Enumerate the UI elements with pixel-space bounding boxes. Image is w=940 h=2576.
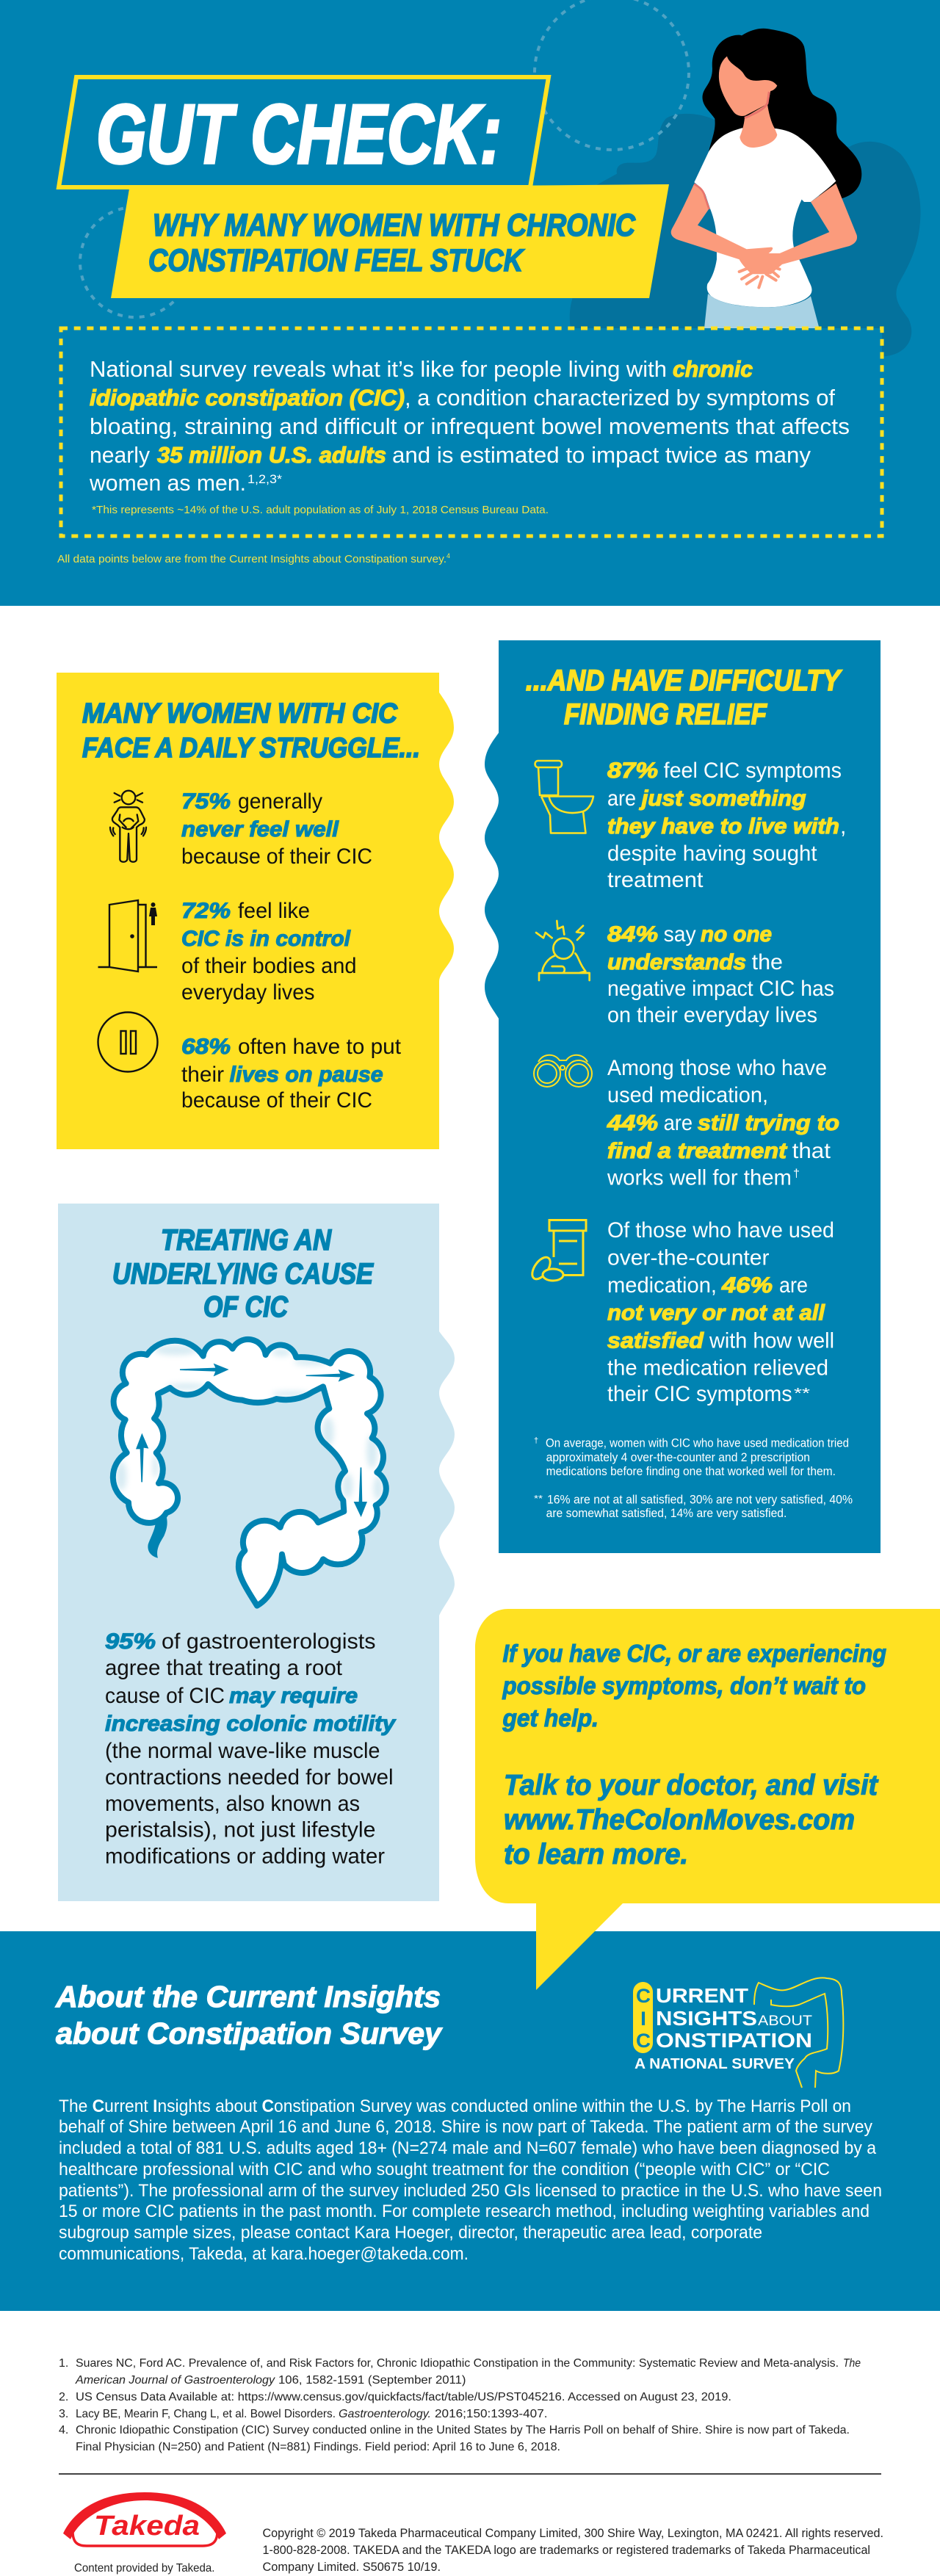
copyright: Copyright © 2019 Takeda Pharmaceutical Company Limited, 300 Shire Way, Lexington, MA 02421. All rights reserved. bbox=[263, 2527, 883, 2540]
stat: 72 percent: 72% bbox=[181, 899, 231, 923]
heading: underlying cause: OF CIC bbox=[203, 1291, 289, 1323]
survey description bbox=[59, 2096, 882, 2264]
heading: daily struggle: FACE A DAILY STRUGGLE... bbox=[82, 733, 420, 764]
stat: 46 percent: medication, bbox=[607, 1273, 717, 1298]
callout: talk to your doctor bbox=[475, 1609, 940, 1990]
stat: 84 percent: the bbox=[752, 950, 783, 974]
callout text: visit website: Talk to your doctor, and visit bbox=[504, 1770, 879, 1801]
stat: 95 percent: cause of CIC bbox=[105, 1684, 225, 1708]
heading: daily struggle bbox=[82, 698, 420, 764]
stat: 46 percent: their CIC symptoms bbox=[607, 1382, 792, 1406]
stat: 87 percent: , bbox=[840, 814, 846, 839]
stat: 95 percent: (the normal wave-like muscle bbox=[105, 1739, 380, 1763]
references: Gastroenterology. bbox=[339, 2408, 431, 2420]
credit line: Content provided by Takeda. bbox=[74, 2562, 214, 2575]
stat: 68 percent bbox=[181, 1035, 402, 1112]
stat: 44 percent: still trying to bbox=[698, 1111, 839, 1135]
stat: 95 percent: contractions needed for bowel bbox=[105, 1765, 394, 1790]
callout text: visit website: www.TheColonMoves.com bbox=[504, 1804, 855, 1836]
stat: 44 percent: used medication, bbox=[607, 1083, 768, 1107]
stat: 68 percent: lives on pause bbox=[230, 1063, 383, 1087]
stat: 44 percent: † bbox=[793, 1168, 800, 1180]
stat: 75 percent: never feel well bbox=[181, 817, 339, 842]
references: Final Physician (N=250) and Patient (N=881) Findings. Field period: April 16 to June 6, 2018. bbox=[76, 2441, 560, 2453]
stat: 95 percent bbox=[105, 1629, 396, 1869]
icon: door bbox=[98, 900, 157, 972]
stat: 87 percent: treatment bbox=[607, 868, 704, 892]
stat: 44 percent: 44% bbox=[607, 1111, 658, 1135]
footnotes: † bbox=[534, 1436, 538, 1445]
icon: toilet bbox=[535, 761, 593, 833]
stat: 75 percent: 75% bbox=[181, 789, 231, 814]
arrows: colon motility direction bbox=[136, 1364, 367, 1517]
stat: 75 percent: because of their CIC bbox=[181, 844, 372, 869]
stat: 95 percent: modifications or adding water bbox=[105, 1845, 385, 1869]
stat: 44 percent: that bbox=[792, 1139, 831, 1163]
intro text: women as men. bbox=[89, 470, 246, 496]
callout text: symptoms: possible symptoms, don’t wait to bbox=[502, 1672, 866, 1699]
heading: underlying cause: UNDERLYING CAUSE bbox=[112, 1258, 374, 1290]
icon: binoculars bbox=[534, 1055, 592, 1087]
dashed circle left bbox=[80, 207, 190, 317]
references: 2016;150:1393-407. bbox=[435, 2408, 548, 2420]
references: 3. bbox=[59, 2408, 68, 2420]
heading: about the survey bbox=[55, 1980, 443, 2050]
intro text: chronic bbox=[673, 356, 753, 382]
data source note: All data points below are from the Current Insights about Constipation survey. bbox=[57, 554, 446, 565]
stat: 95 percent: movements, also known as bbox=[105, 1792, 360, 1816]
logo: Takeda bbox=[63, 2492, 226, 2546]
stat: 72 percent: CIC is in control bbox=[181, 927, 351, 951]
stat: 95 percent: 95% bbox=[105, 1629, 156, 1654]
stat: 72 percent: everyday lives bbox=[181, 980, 314, 1005]
stat: 87 percent: feel CIC symptoms bbox=[664, 759, 842, 783]
stat: 75 percent: generally bbox=[238, 789, 322, 814]
references: Suares NC, Ford AC. Prevalence of, and Risk Factors for, Chronic Idiopathic Constipation in the Community: Systematic Review and Meta-analysis. bbox=[76, 2357, 839, 2370]
intro text: bloating, straining and difficult or infrequent bowel movements that affects bbox=[90, 413, 850, 439]
references: Chronic Idiopathic Constipation (CIC) Survey conducted online in the United States by The Harris Poll on behalf of Shire. Shire is now part of Takeda. bbox=[76, 2424, 850, 2436]
references: US Census Data Available at: https://www.census.gov/quickfacts/fact/table/US/PST045216. Accessed on August 23, 2019. bbox=[76, 2391, 731, 2403]
title box: Gut Check: GUT CHECK: bbox=[96, 88, 502, 181]
stat: 46 percent: not very or not at all bbox=[607, 1301, 825, 1325]
heading: finding relief: FINDING RELIEF bbox=[564, 698, 767, 731]
footnotes: are somewhat satisfied, 14% are very satisfied. bbox=[546, 1507, 787, 1520]
stat: 72 percent: of their bodies and bbox=[181, 954, 357, 978]
callout text: symptoms bbox=[502, 1640, 886, 1732]
copyright: 1-800-828-2008. TAKEDA and the TAKEDA logo are trademarks or registered trademarks of Takeda Pharmaceutical bbox=[263, 2544, 870, 2557]
survey description: behalf of Shire between April 16 and June 6, 2018. Shire is now part of Takeda. The patient arm of the survey bbox=[59, 2117, 872, 2137]
logo: Current Insights about Constipation: C bbox=[636, 1985, 651, 2007]
callout text: symptoms: If you have CIC, or are experiencing bbox=[502, 1640, 886, 1667]
references: 2. bbox=[59, 2391, 68, 2403]
copyright: Company Limited. S50675 10/19. bbox=[263, 2561, 441, 2574]
intro text: 1,2,3* bbox=[247, 472, 282, 486]
intro text: idiopathic constipation (CIC) bbox=[90, 385, 405, 410]
references: Lacy BE, Mearin F, Chang L, et al. Bowel Disorders. bbox=[76, 2408, 336, 2420]
stat: 44 percent: works well for them bbox=[607, 1166, 792, 1190]
callout text: symptoms: get help. bbox=[502, 1704, 599, 1732]
logo: Current Insights about Constipation: ABOUT bbox=[758, 2014, 812, 2029]
title box: Gut Check bbox=[59, 77, 549, 187]
stat: 68 percent: their bbox=[181, 1063, 224, 1087]
header band bbox=[0, 0, 940, 606]
icon: pause bbox=[98, 1012, 157, 1072]
logo: Current Insights about Constipation: C bbox=[636, 2030, 651, 2052]
survey description: communications, Takeda, at kara.hoeger@takeda.com. bbox=[59, 2244, 469, 2264]
stat: 46 percent: with how well bbox=[709, 1329, 834, 1353]
logo: Takeda: Takeda bbox=[94, 2511, 200, 2541]
stat: 68 percent: because of their CIC bbox=[181, 1088, 372, 1112]
heading: underlying cause: TREATING AN bbox=[161, 1224, 332, 1256]
references: American Journal of Gastroenterology bbox=[75, 2374, 275, 2387]
callout text: visit website bbox=[504, 1770, 879, 1870]
stat: 72 percent bbox=[181, 899, 357, 1005]
stat: 95 percent: agree that treating a root bbox=[105, 1656, 343, 1680]
subtitle box: WHY MANY WOMEN WITH CHRONIC bbox=[153, 208, 636, 243]
stat: 95 percent: of gastroenterologists bbox=[162, 1629, 376, 1654]
survey description: patients”). The professional arm of the survey included 250 GIs licensed to practice in the U.S. who have seen bbox=[59, 2181, 882, 2201]
references: The bbox=[843, 2357, 861, 2370]
stat: 84 percent: say bbox=[664, 922, 696, 947]
stat: 46 percent bbox=[607, 1218, 834, 1406]
stat: 84 percent: on their everyday lives bbox=[607, 1003, 817, 1027]
survey description: 15 or more CIC patients in the past month. For complete research method, including weighting variables and bbox=[59, 2201, 870, 2221]
colon illustration bbox=[113, 1339, 386, 1606]
survey band bbox=[0, 1931, 940, 2311]
woman illustration bbox=[671, 29, 861, 328]
stat: 72 percent: feel like bbox=[238, 899, 310, 923]
stat: 44 percent: find a treatment bbox=[607, 1139, 788, 1163]
stat: 95 percent: may require bbox=[229, 1684, 358, 1708]
panel: difficulty finding relief bbox=[485, 640, 881, 1553]
footnotes: On average, women with CIC who have used medication tried bbox=[546, 1437, 849, 1450]
logo: Current Insights about Constipation: NSIGHTS bbox=[656, 2007, 757, 2030]
heading: about the survey: About the Current Insights bbox=[55, 1980, 441, 2014]
stat: 46 percent: Of those who have used bbox=[607, 1218, 834, 1242]
stat: 46 percent: satisfied bbox=[607, 1329, 704, 1353]
icon: frustrated person bbox=[536, 921, 590, 980]
stat: 46 percent: ** bbox=[794, 1386, 810, 1402]
references: 4. bbox=[59, 2424, 68, 2436]
stat: 87 percent: just something bbox=[638, 786, 806, 811]
data source note: 4 bbox=[446, 552, 450, 560]
footnotes: 16% are not at all satisfied, 30% are not very satisfied, 40% bbox=[547, 1494, 853, 1507]
panel: treating an underlying cause bbox=[58, 1204, 455, 1901]
references bbox=[59, 2357, 861, 2453]
heading: about the survey: about Constipation Survey bbox=[56, 2016, 443, 2050]
stat: 75 percent bbox=[181, 789, 372, 869]
stat: 84 percent: understands bbox=[607, 950, 746, 974]
dashed circle top bbox=[535, 0, 689, 150]
stat: 46 percent: over-the-counter bbox=[607, 1245, 770, 1270]
intro text: nearly bbox=[90, 442, 150, 468]
stat: 87 percent: 87% bbox=[607, 759, 658, 783]
stat: 95 percent: peristalsis), not just lifestyle bbox=[105, 1818, 376, 1842]
stat: 68 percent: often have to put bbox=[238, 1035, 402, 1059]
stat: 68 percent: 68% bbox=[181, 1035, 231, 1059]
stat: 87 percent: are bbox=[607, 786, 636, 811]
intro dashed box bbox=[61, 328, 882, 536]
callout text: visit website: to learn more. bbox=[504, 1839, 688, 1870]
panel: daily struggle bbox=[57, 673, 454, 1149]
subtitle box bbox=[111, 184, 669, 298]
logo: Current Insights about Constipation: ONSTIPATION bbox=[656, 2029, 812, 2052]
logo: Current Insights about Constipation: URRENT bbox=[656, 1984, 748, 2007]
icon: person in pain bbox=[110, 791, 146, 862]
stat: 46 percent: 46% bbox=[721, 1273, 773, 1298]
references: 106, 1582-1591 (September 2011) bbox=[278, 2374, 466, 2387]
survey description: included a total of 881 U.S. adults aged 18+ (N=274 male and N=607 female) who have been diagnosed by a bbox=[59, 2138, 877, 2158]
footnotes: ** bbox=[534, 1493, 543, 1504]
footnotes bbox=[534, 1436, 853, 1520]
stat: 84 percent: negative impact CIC has bbox=[607, 977, 834, 1001]
stat: 87 percent: they have to live with bbox=[607, 814, 839, 839]
stat: 46 percent: the medication relieved bbox=[607, 1356, 828, 1381]
heading: finding relief: ...AND HAVE DIFFICULTY bbox=[526, 665, 842, 697]
logo: Current Insights about Constipation: I bbox=[640, 2008, 646, 2030]
stat: 44 percent bbox=[607, 1056, 839, 1190]
intro text: National survey reveals what it’s like for people living with bbox=[90, 356, 667, 382]
subtitle box: CONSTIPATION FEEL STUCK bbox=[148, 243, 524, 278]
intro text: and is estimated to impact twice as many bbox=[392, 442, 811, 468]
intro footnote: *This represents ~14% of the U.S. adult population as of July 1, 2018 Census Bureau Data. bbox=[92, 504, 549, 516]
survey description: subgroup sample sizes, please contact Kara Hoeger, director, therapeutic area lead, corporate bbox=[59, 2223, 762, 2243]
stat: 46 percent: are bbox=[779, 1273, 808, 1298]
footnotes: approximately 4 over-the-counter and 2 prescription bbox=[546, 1451, 810, 1464]
survey description: healthcare professional with CIC and who sought treatment for the condition (“people with CIC” or “CIC bbox=[59, 2160, 830, 2179]
stat: 87 percent bbox=[607, 759, 846, 892]
heading: daily struggle: MANY WOMEN WITH CIC bbox=[82, 698, 398, 729]
intro text bbox=[89, 356, 850, 496]
stat: 95 percent: increasing colonic motility bbox=[105, 1712, 396, 1736]
survey description: The Current Insights about Constipation Survey was conducted online within the U.S. by The Harris Poll on bbox=[59, 2096, 851, 2116]
stat: 84 percent: no one bbox=[701, 922, 772, 947]
logo: Current Insights about Constipation bbox=[633, 1978, 843, 2088]
references: 1. bbox=[59, 2357, 68, 2370]
stat: 87 percent: despite having sought bbox=[607, 842, 817, 866]
stat: 44 percent: are bbox=[664, 1111, 693, 1135]
intro text: 35 million U.S. adults bbox=[157, 442, 386, 468]
footnotes: medications before finding one that worked well for them. bbox=[546, 1465, 836, 1478]
stat: 84 percent bbox=[607, 922, 834, 1027]
heading: underlying cause bbox=[112, 1224, 374, 1323]
dark blob behind woman bbox=[570, 114, 920, 356]
heading: finding relief bbox=[526, 665, 842, 731]
copyright bbox=[263, 2527, 883, 2574]
intro text: , a condition characterized by symptoms of bbox=[405, 385, 835, 410]
icon: medication bottle bbox=[529, 1220, 586, 1282]
stat: 84 percent: 84% bbox=[607, 922, 658, 947]
logo: Current Insights about Constipation: A NATIONAL SURVEY bbox=[634, 2056, 795, 2072]
stat: 44 percent: Among those who have bbox=[607, 1056, 827, 1080]
